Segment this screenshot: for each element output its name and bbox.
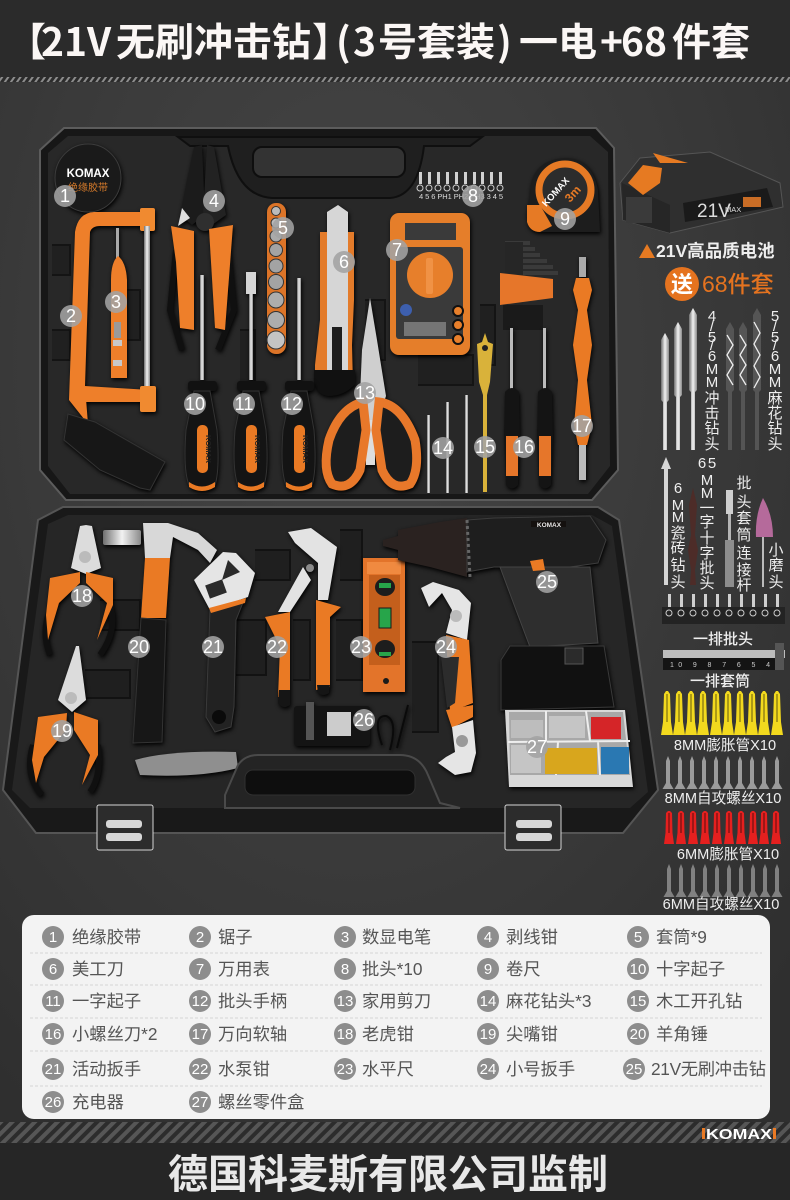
grinding head bbox=[756, 498, 784, 591]
row 4: 尖嘴钳 bbox=[506, 1024, 558, 1044]
tool 11: flathead screwdriver: KOMAX bbox=[253, 435, 262, 463]
tool 9: tape measure bbox=[526, 158, 600, 232]
row 1: 2 bbox=[196, 929, 204, 946]
row 1: 4 bbox=[484, 929, 492, 946]
row 3: 家用剪刀 bbox=[362, 991, 431, 1011]
row 3 bbox=[42, 990, 742, 1012]
row 4: 18 bbox=[337, 1026, 353, 1043]
hazard stripe with logo bbox=[0, 1122, 790, 1143]
row 2: 8 bbox=[341, 961, 349, 978]
number badges on base: 21 bbox=[203, 637, 223, 657]
twist drill bits bbox=[726, 308, 783, 453]
tool 7: digital multimeter bbox=[390, 213, 470, 355]
6mm screws label: 6MM自攻螺丝X10 bbox=[663, 896, 779, 913]
title: 】 bbox=[312, 12, 351, 68]
row 3: 15 bbox=[630, 993, 646, 1010]
hazard stripe with logo: KOMAX bbox=[706, 1126, 772, 1143]
tool 1: insulating tape: 绝缘胶带 bbox=[68, 181, 108, 194]
row 5: 24 bbox=[480, 1061, 496, 1078]
row 5: 25 bbox=[626, 1061, 642, 1078]
number badges on base: 26 bbox=[354, 710, 374, 730]
red wall anchors bbox=[664, 811, 781, 863]
row 5: 水泵钳 bbox=[218, 1059, 270, 1079]
tool 20: claw hammer bbox=[103, 523, 217, 743]
extension rod bbox=[725, 475, 752, 594]
tool 18: combination pliers bbox=[45, 525, 113, 655]
6mm tapping screws bbox=[663, 864, 782, 913]
tool 16: precision screwdrivers bbox=[504, 328, 553, 488]
number badges on base: 22 bbox=[267, 637, 287, 657]
row 4: 老虎钳 bbox=[362, 1024, 414, 1044]
row 2: 7 bbox=[196, 961, 204, 978]
tool 26: charger bbox=[294, 702, 408, 750]
tile bit label: 6MM瓷砖钻头 bbox=[670, 480, 686, 591]
row 3: 批头手柄 bbox=[218, 991, 287, 1011]
lid carrying handle bbox=[253, 147, 405, 177]
8mm screws label: 8MM自攻螺丝X10 bbox=[665, 790, 781, 807]
row 2: 十字起子 bbox=[656, 959, 725, 979]
row 2: 美工刀 bbox=[72, 959, 124, 979]
row 6 bbox=[42, 1091, 304, 1113]
sockets label: 一排套筒 bbox=[690, 673, 750, 690]
title bar bbox=[0, 0, 790, 82]
row 3: 13 bbox=[337, 993, 353, 1010]
title: 68 bbox=[621, 12, 667, 68]
row 1: 5 bbox=[634, 929, 642, 946]
battery caption: 21V高品质电池 bbox=[656, 241, 775, 261]
tool 8: screwdriver bits row: 4 5 6 PH1 PH2 PH3 3 4 5 bbox=[419, 192, 503, 201]
number badges on base: 20 bbox=[129, 637, 149, 657]
tool 12: bit-holder screwdriver: KOMAX bbox=[301, 435, 310, 463]
row 3: 14 bbox=[480, 993, 496, 1010]
double-ended bit label: 65MM一字十字批头 bbox=[698, 455, 716, 592]
footer banner: 德国科麦斯有限公司监制 bbox=[168, 1153, 608, 1197]
tool 10: phillips screwdriver bbox=[185, 275, 218, 491]
tool 2: hacksaw bbox=[64, 208, 165, 490]
tool 10: phillips screwdriver: KOMAX bbox=[204, 435, 213, 463]
base carrying handle bbox=[225, 755, 460, 808]
twist bits label: 5/5/6MM麻花钻头 bbox=[767, 308, 783, 453]
extension rod label: 批头套筒连接杆 bbox=[736, 475, 752, 594]
row 1: 剥线钳 bbox=[506, 927, 558, 947]
number badges on lid: 4 bbox=[209, 191, 219, 211]
tool 17: flexible shaft bbox=[573, 257, 592, 480]
right latch bbox=[505, 805, 561, 850]
row 5: 21V无刷冲击钻 bbox=[651, 1059, 766, 1079]
grinding head label: 小磨头 bbox=[768, 542, 784, 591]
tool 12: bit-holder screwdriver bbox=[282, 278, 315, 491]
number badges on lid: 14 bbox=[433, 438, 453, 458]
title: 3 bbox=[353, 12, 376, 68]
double-ended bit bbox=[688, 455, 716, 592]
tool 19: needle-nose pliers bbox=[30, 646, 99, 795]
folding multi-tool bbox=[135, 752, 238, 776]
yellow wall anchors bbox=[661, 691, 783, 754]
row 1 bbox=[42, 926, 707, 948]
tool 1: insulating tape: KOMAX bbox=[67, 168, 110, 180]
row 5: 21 bbox=[45, 1061, 61, 1078]
row 4: 19 bbox=[480, 1026, 496, 1043]
title: 21V bbox=[41, 12, 112, 68]
row 6: 26 bbox=[45, 1094, 61, 1111]
tool 8: screwdriver bits row bbox=[417, 172, 503, 201]
row 4: 羊角锤 bbox=[656, 1024, 708, 1044]
title: ( bbox=[336, 12, 351, 68]
number badges on base: 24 bbox=[436, 637, 456, 657]
tool 24: snap wrench bbox=[421, 582, 476, 775]
tool 25: cordless impact drill: KOMAX bbox=[537, 522, 562, 529]
number badges on lid: 5 bbox=[278, 218, 288, 238]
tool 22: water pump pliers bbox=[265, 528, 341, 707]
row 6: 充电器 bbox=[72, 1092, 124, 1112]
battery pack bbox=[620, 152, 783, 233]
tool 13: scissors bbox=[326, 298, 417, 486]
number badges on lid: 10 bbox=[185, 394, 205, 414]
gift badge: 送 bbox=[671, 272, 693, 297]
row 5 bbox=[42, 1058, 766, 1080]
row 1: 3 bbox=[341, 929, 349, 946]
row 3: 一字起子 bbox=[72, 991, 141, 1011]
tool 6: utility knife bbox=[314, 205, 355, 396]
title: 无刷冲击钻 bbox=[116, 12, 311, 68]
tool 3: voltage tester pen bbox=[111, 228, 127, 378]
row 6: 螺丝零件盒 bbox=[218, 1092, 304, 1112]
row 2: 万用表 bbox=[218, 959, 270, 979]
row 1: 数显电笔 bbox=[362, 927, 431, 947]
8mm tapping screws bbox=[662, 756, 782, 807]
tile drill bit bbox=[661, 457, 686, 591]
row 1: 套筒*9 bbox=[656, 927, 707, 947]
impact bits label: 4/5/6MM冲击钻头 bbox=[704, 308, 720, 453]
row 2: 10 bbox=[630, 961, 646, 978]
row 5: 23 bbox=[337, 1061, 353, 1078]
number badges on lid: 12 bbox=[282, 394, 302, 414]
number badges on lid: 15 bbox=[475, 437, 495, 457]
row 6: 27 bbox=[192, 1094, 208, 1111]
hex key set bbox=[500, 242, 558, 330]
row 4: 20 bbox=[630, 1026, 646, 1043]
row 3: 11 bbox=[45, 993, 61, 1010]
gift badge: 68件套 bbox=[702, 271, 774, 297]
tool 14: twist drill bits bbox=[427, 395, 468, 493]
title: 件套 bbox=[672, 12, 750, 68]
row 1: 绝缘胶带 bbox=[72, 927, 141, 947]
row of bits bbox=[662, 594, 785, 648]
number badges on base: 23 bbox=[351, 637, 371, 657]
row 5: 22 bbox=[192, 1061, 208, 1078]
row 2: 9 bbox=[484, 961, 492, 978]
gift badge bbox=[665, 267, 774, 301]
tool 27: screw and parts box bbox=[505, 710, 633, 787]
row 2: 6 bbox=[49, 961, 57, 978]
8mm anchors label: 8MM膨胀管X10 bbox=[674, 737, 776, 754]
number badges on lid: 6 bbox=[339, 252, 349, 272]
row 3: 木工开孔钻 bbox=[656, 991, 742, 1011]
number badges on lid: 3 bbox=[111, 292, 121, 312]
number badges on base: 18 bbox=[72, 586, 92, 606]
tool 15: spade drill bit bbox=[477, 333, 493, 492]
number badges on base bbox=[51, 571, 558, 758]
toolbox lid (upper case) bbox=[40, 128, 618, 500]
number badges on lid bbox=[54, 185, 593, 459]
row 1: 锯子 bbox=[218, 927, 253, 947]
title: 【 bbox=[7, 12, 46, 68]
title: ) bbox=[497, 12, 512, 68]
row of sockets bbox=[663, 643, 785, 690]
number badges on lid: 16 bbox=[514, 437, 534, 457]
row 5: 小号扳手 bbox=[506, 1059, 575, 1079]
number badges on lid: 17 bbox=[572, 416, 592, 436]
tool 4: wire stripper bbox=[170, 145, 234, 350]
toolbox base (lower case) bbox=[3, 507, 658, 850]
bits label: 一排批头 bbox=[693, 631, 753, 648]
number badges on lid: 13 bbox=[355, 383, 375, 403]
title: 一电 bbox=[519, 12, 597, 68]
tool 9: tape measure: 3m bbox=[562, 183, 584, 205]
number badges on base: 25 bbox=[537, 572, 557, 592]
row 3: 12 bbox=[192, 993, 208, 1010]
row 5: 活动扳手 bbox=[72, 1059, 141, 1079]
row 2 bbox=[42, 958, 725, 980]
number badges on lid: 7 bbox=[392, 240, 402, 260]
number badges on base: 27 bbox=[527, 737, 547, 757]
legend panel bbox=[22, 915, 770, 1119]
row of sockets: 10 9 8 7 6 5 4 bbox=[670, 662, 770, 669]
number badges on lid: 11 bbox=[235, 394, 253, 414]
row 4: 17 bbox=[192, 1026, 208, 1043]
tool 5: socket set strip bbox=[267, 203, 286, 354]
tool 21: adjustable wrench bbox=[194, 552, 255, 732]
tool 11: flathead screwdriver bbox=[234, 272, 267, 491]
battery pack: MAX bbox=[725, 205, 741, 214]
battery pack: 21V bbox=[697, 201, 731, 222]
row 4 bbox=[42, 1023, 708, 1045]
tool 23: spirit level bbox=[363, 558, 405, 692]
tool 25: cordless impact drill bbox=[383, 516, 614, 710]
row 3: 麻花钻头*3 bbox=[506, 991, 591, 1011]
number badges on lid: 8 bbox=[468, 186, 478, 206]
row 4: 16 bbox=[45, 1026, 61, 1043]
footer banner bbox=[0, 1143, 790, 1200]
6mm anchors label: 6MM膨胀管X10 bbox=[677, 846, 779, 863]
row 4: 万向软轴 bbox=[218, 1024, 287, 1044]
title: 号套装 bbox=[378, 12, 495, 68]
left latch bbox=[97, 805, 153, 850]
row 5: 水平尺 bbox=[362, 1059, 414, 1079]
number badges on base: 19 bbox=[52, 721, 72, 741]
tool 1: insulating tape bbox=[55, 144, 121, 212]
row 2: 卷尺 bbox=[506, 959, 541, 979]
row 1: 1 bbox=[49, 929, 57, 946]
number badges on lid: 1 bbox=[60, 186, 70, 206]
row 2: 批头*10 bbox=[362, 959, 423, 979]
row 4: 小螺丝刀*2 bbox=[72, 1024, 157, 1044]
title: + bbox=[600, 12, 623, 68]
tool 9: tape measure: KOMAX bbox=[540, 175, 572, 209]
number badges on lid: 2 bbox=[66, 306, 76, 326]
impact drill bits bbox=[661, 308, 720, 453]
number badges on lid: 9 bbox=[560, 209, 570, 229]
